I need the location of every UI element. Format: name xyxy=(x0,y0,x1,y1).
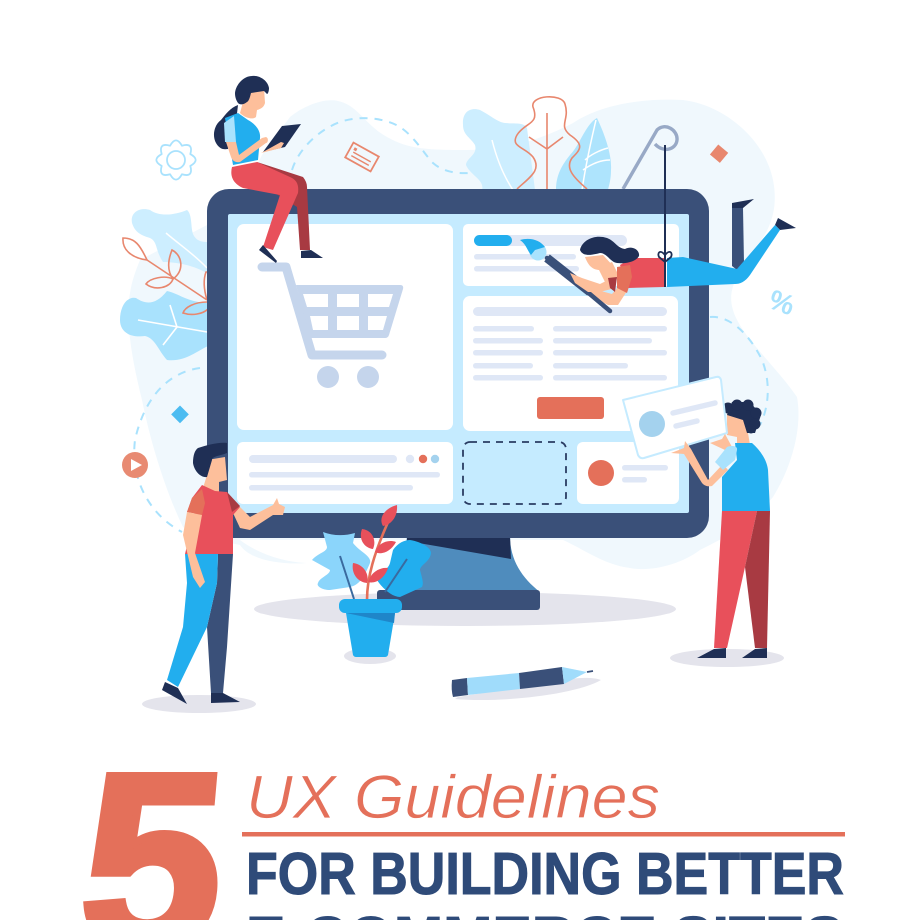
upper arm xyxy=(570,273,615,292)
leaf: blue lower xyxy=(120,291,210,360)
hair xyxy=(580,237,639,263)
foliage: top xyxy=(463,97,677,190)
trousers front leg xyxy=(231,162,298,250)
panel: dashed placeholder xyxy=(463,442,566,504)
brush handle xyxy=(547,258,610,311)
shoe back xyxy=(301,250,323,258)
background blob xyxy=(128,100,798,569)
pot shadow xyxy=(344,648,396,664)
red leaves xyxy=(353,505,397,583)
trouser back leg xyxy=(257,162,310,250)
rope xyxy=(664,145,666,287)
dark sleeve xyxy=(608,277,617,292)
tablet xyxy=(263,124,301,152)
arm lower xyxy=(583,285,627,305)
icon: credit card xyxy=(345,143,379,171)
neck and face xyxy=(727,413,750,445)
panel: article xyxy=(463,296,678,431)
leaf: pale blue xyxy=(463,109,535,190)
sleeve xyxy=(617,265,632,293)
blue leg xyxy=(167,554,218,687)
panel: top right xyxy=(463,224,679,286)
dashed path: top xyxy=(292,118,470,173)
figure: woman sitting with tablet xyxy=(214,76,323,263)
figure: man holding card xyxy=(623,377,784,667)
shoes xyxy=(697,648,767,658)
tablet hand xyxy=(261,142,284,153)
monitor screen xyxy=(228,214,689,513)
stand base xyxy=(377,590,540,610)
shirt xyxy=(185,485,240,554)
brush bristles xyxy=(520,239,545,255)
neck and face xyxy=(203,457,227,493)
sleeve xyxy=(187,489,205,515)
blue trousers xyxy=(667,225,780,287)
neck and face xyxy=(240,88,265,118)
floating card xyxy=(623,377,727,458)
button xyxy=(537,397,604,419)
pot rim xyxy=(339,599,402,613)
hair xyxy=(193,443,227,477)
sleeve xyxy=(715,446,737,470)
potted plant xyxy=(312,505,431,664)
shadow xyxy=(142,695,256,713)
arm xyxy=(226,137,268,162)
icon: shopping cart xyxy=(262,267,403,388)
panel: product with cart xyxy=(237,224,453,430)
dashed path: left xyxy=(134,368,200,532)
shirt xyxy=(722,443,770,511)
figure: flying woman with brush xyxy=(520,199,796,311)
shadow xyxy=(670,649,784,667)
panel: lower left xyxy=(237,442,453,504)
face xyxy=(585,255,615,270)
stand neck shadow xyxy=(407,536,511,559)
leaf right xyxy=(377,540,431,597)
icon: blue diamond xyxy=(171,406,189,423)
icon: coral diamond xyxy=(710,145,728,163)
harness knot xyxy=(658,252,672,262)
torso xyxy=(225,113,260,165)
dashed path: right xyxy=(710,317,768,425)
ponytail xyxy=(214,105,238,149)
coral stem xyxy=(367,507,395,600)
brush grip xyxy=(547,258,590,292)
dark sleeve xyxy=(227,492,240,512)
shoes xyxy=(732,199,796,230)
leaf: blue xyxy=(556,118,611,190)
sleeve xyxy=(224,116,236,142)
heading rule xyxy=(242,832,845,836)
curly hair xyxy=(722,400,762,434)
icon: percent: % xyxy=(765,284,799,321)
pen shadow xyxy=(455,678,601,700)
leaf: coral outline xyxy=(515,97,587,189)
dark leg xyxy=(207,554,233,693)
leaf: pale blue upper xyxy=(132,209,210,275)
right arm xyxy=(233,498,285,530)
monitor frame xyxy=(207,189,709,538)
figure: man pointing xyxy=(142,443,285,713)
foliage: left xyxy=(120,209,210,360)
dark red leg xyxy=(745,511,770,648)
pen xyxy=(452,667,601,700)
hair xyxy=(235,76,269,104)
left arm xyxy=(183,512,205,588)
monitor shadow xyxy=(254,592,676,626)
branch: coral outline xyxy=(123,238,209,314)
hook xyxy=(623,127,677,189)
monitor stand xyxy=(400,536,540,592)
dark stems xyxy=(340,556,407,599)
monitor xyxy=(207,189,709,610)
brush ferrule xyxy=(530,244,546,260)
icon: play button xyxy=(122,452,148,478)
shoe front xyxy=(259,245,277,263)
dark leg xyxy=(732,208,744,270)
shoes xyxy=(162,682,240,704)
leaf left xyxy=(312,532,370,590)
pot shade xyxy=(346,613,395,623)
heading: UX Guidelines: UX Guidelines xyxy=(246,763,660,831)
pot body xyxy=(346,613,395,657)
heading: for building better: FOR BUILDING BETTER xyxy=(246,841,844,907)
panel: lower right xyxy=(577,442,679,504)
red leg xyxy=(714,511,757,648)
neck xyxy=(598,262,620,284)
arm and hands xyxy=(671,434,732,486)
title block xyxy=(71,722,845,920)
torso xyxy=(620,258,664,288)
icon: gear xyxy=(156,140,196,180)
